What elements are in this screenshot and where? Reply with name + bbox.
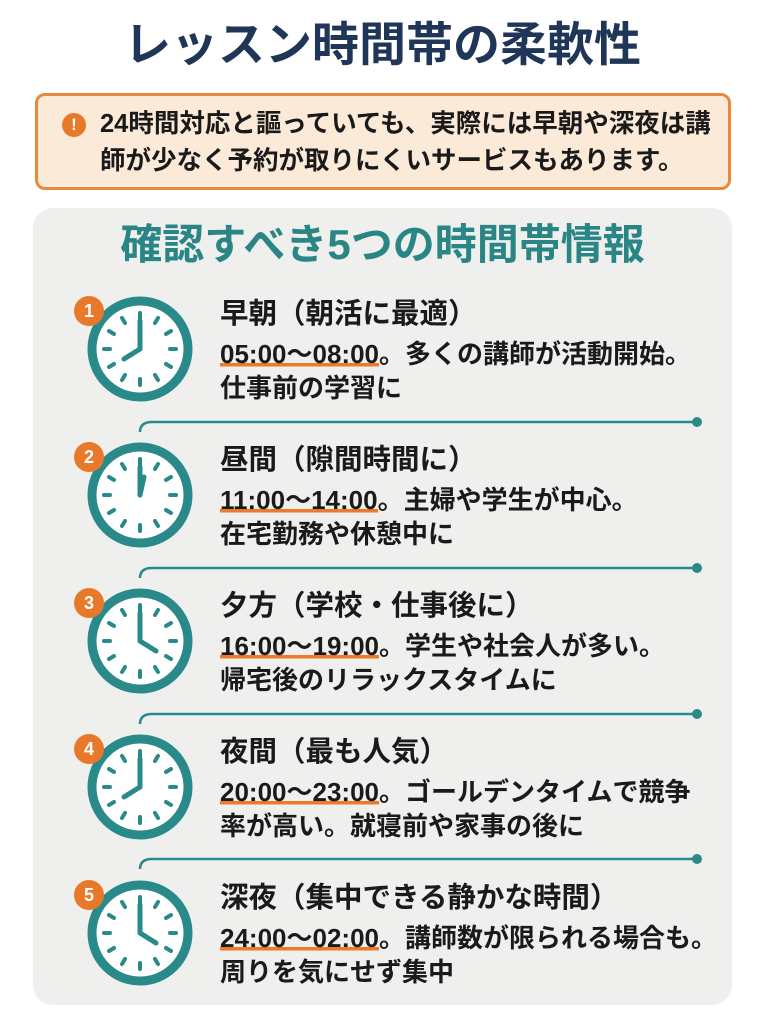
title: レッスン時間帯の柔軟性 (124, 18, 641, 71)
text 4: 率が高い。就寝前や家事の後に (220, 811, 584, 841)
icon: clock 4:00 (88, 880, 192, 986)
text 5: 24:00〜02:00。講師数が限られる場合も。 (220, 923, 717, 953)
subheading: 確認すべき5つの時間帯情報 (120, 221, 645, 268)
text 1: 05:00〜08:00。多くの講師が活動開始。 (220, 339, 691, 369)
badge 2 (74, 442, 104, 472)
text 3: 帰宅後のリラックスタイムに (220, 665, 557, 695)
badge 1: 1 (84, 301, 94, 321)
text 4: 20:00〜23:00。ゴールデンタイムで競争 (220, 777, 690, 807)
text 1: 仕事前の学習に (220, 373, 402, 403)
text 5 (220, 882, 717, 987)
text 4: 夜間（最も人気） (220, 736, 448, 768)
item 3 (74, 588, 665, 695)
text 4 (220, 736, 690, 841)
panel: time slots (33, 208, 732, 1005)
badge 5: 5 (84, 885, 94, 905)
badge 5 (74, 880, 104, 910)
text 1: 早朝（朝活に最適） (220, 298, 477, 330)
text 3: 夕方（学校・仕事後に） (220, 590, 534, 622)
text 2: 昼間（隙間時間に） (220, 444, 477, 476)
text 1 (220, 298, 691, 403)
callout text (100, 110, 711, 175)
icon: exclamation (62, 113, 86, 137)
item 5 (74, 880, 717, 987)
item 4 (74, 734, 690, 841)
text 5: 深夜（集中できる静かな時間） (220, 882, 618, 914)
icon: clock 8:00 (88, 296, 192, 402)
badge 2: 2 (84, 447, 94, 467)
badge 3 (74, 588, 104, 618)
badge 3: 3 (84, 593, 94, 613)
badge 1 (74, 296, 104, 326)
badge 4: 4 (84, 739, 94, 759)
item 1 (74, 296, 691, 403)
icon: clock 12:00 (88, 442, 192, 548)
text 2 (220, 444, 638, 549)
icon: clock 4:00 (88, 588, 192, 694)
item 2 (74, 442, 638, 549)
text 2: 11:00〜14:00。主婦や学生が中心。 (220, 485, 638, 515)
callout text: 24時間対応と謳っていても、実際には早朝や深夜は講 (100, 110, 711, 138)
text 2: 在宅勤務や休憩中に (220, 519, 454, 549)
icon: exclamation: ! (71, 115, 77, 134)
callout: warning (35, 93, 731, 190)
text 3 (220, 590, 665, 695)
icon: clock 8:00 (88, 734, 192, 840)
text 3: 16:00〜19:00。学生や社会人が多い。 (220, 631, 665, 661)
badge 4 (74, 734, 104, 764)
callout text: 師が少なく予約が取りにくいサービスもあります。 (100, 147, 683, 175)
text 5: 周りを気にせず集中 (220, 957, 454, 987)
